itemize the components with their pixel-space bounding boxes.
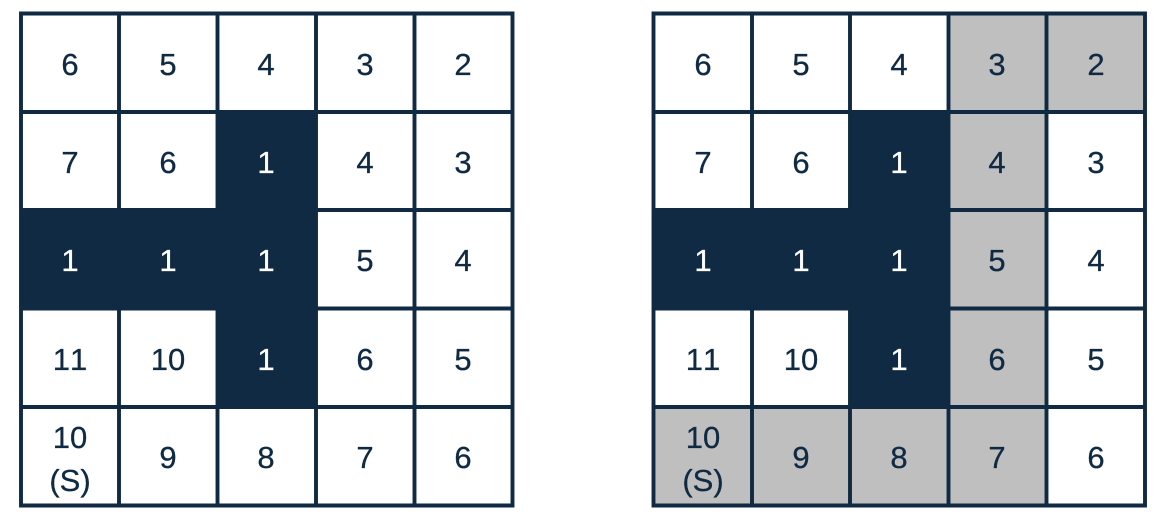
panel: right grid with highlighted path: 10 — [784, 342, 818, 377]
panel: left grid with distances: 6 — [159, 145, 177, 180]
panel: left grid with distances: 6 — [61, 47, 79, 82]
panel: right grid with highlighted path: 4 — [988, 145, 1006, 180]
panel: left grid with distances: 1 — [159, 243, 177, 278]
panel: right grid with highlighted path: 11 — [686, 342, 720, 377]
panel: right grid with highlighted path — [654, 14, 1145, 506]
panel: left grid with distances: 10 — [151, 342, 185, 377]
panel: right grid with highlighted path: 3 — [1087, 145, 1105, 180]
panel: right grid with highlighted path: 6 — [988, 342, 1006, 377]
panel: right grid with highlighted path: 5 — [1087, 342, 1105, 377]
panel: right grid with highlighted path: 3 — [988, 47, 1006, 82]
panel: left grid with distances: 1 — [257, 243, 275, 278]
panel: right grid with highlighted path: 7 — [988, 440, 1006, 475]
panel: right grid with highlighted path: 6 — [694, 47, 712, 82]
panel: left grid with distances: 7 — [356, 440, 374, 475]
panel: left grid with distances: 3 — [356, 47, 374, 82]
panel: right grid with highlighted path: 4 — [890, 47, 908, 82]
panel: left grid with distances: 4 — [356, 145, 374, 180]
panel: left grid with distances — [21, 14, 512, 506]
panel: left grid with distances: (S) — [49, 463, 91, 498]
panel: right grid with highlighted path: 6 — [792, 145, 810, 180]
panel: left grid with distances: 2 — [454, 47, 472, 82]
panel: right grid with highlighted path: 8 — [890, 440, 908, 475]
panel: left grid with distances: 8 — [257, 440, 275, 475]
panel: left grid with distances: 7 — [61, 145, 79, 180]
panel: right grid with highlighted path: 4 — [1087, 243, 1105, 278]
panel: right grid with highlighted path: 1 — [792, 243, 810, 278]
panel: right grid with highlighted path: 9 — [792, 440, 810, 475]
panel: left grid with distances: 9 — [159, 440, 177, 475]
panel: left grid with distances: 1 — [257, 342, 275, 377]
panel: right grid with highlighted path: 5 — [988, 243, 1006, 278]
panel: right grid with highlighted path: 1 — [890, 243, 908, 278]
panel: left grid with distances: 6 — [454, 440, 472, 475]
panel: left grid with distances: 1 — [61, 243, 79, 278]
panel: left grid with distances: 11 — [53, 342, 87, 377]
panel: right grid with highlighted path: 7 — [694, 145, 712, 180]
panel: left grid with distances: 5 — [356, 243, 374, 278]
panel: right grid with highlighted path: (S) — [682, 463, 724, 498]
panel: left grid with distances: 10 — [53, 420, 87, 455]
panel: right grid with highlighted path: 1 — [890, 145, 908, 180]
panel: right grid with highlighted path: 10 — [686, 420, 720, 455]
panel: left grid with distances: 5 — [454, 342, 472, 377]
panel: left grid with distances: 3 — [454, 145, 472, 180]
panel: right grid with highlighted path: 6 — [1087, 440, 1105, 475]
panel: right grid with highlighted path: 1 — [890, 342, 908, 377]
panel: right grid with highlighted path: 1 — [694, 243, 712, 278]
panel: left grid with distances: 1 — [257, 145, 275, 180]
panel: left grid with distances: 4 — [257, 47, 275, 82]
panel: left grid with distances: 6 — [356, 342, 374, 377]
panel: right grid with highlighted path: 5 — [792, 47, 810, 82]
panel: left grid with distances: 4 — [454, 243, 472, 278]
panel: left grid with distances: 5 — [159, 47, 177, 82]
panel: right grid with highlighted path: 2 — [1087, 47, 1105, 82]
